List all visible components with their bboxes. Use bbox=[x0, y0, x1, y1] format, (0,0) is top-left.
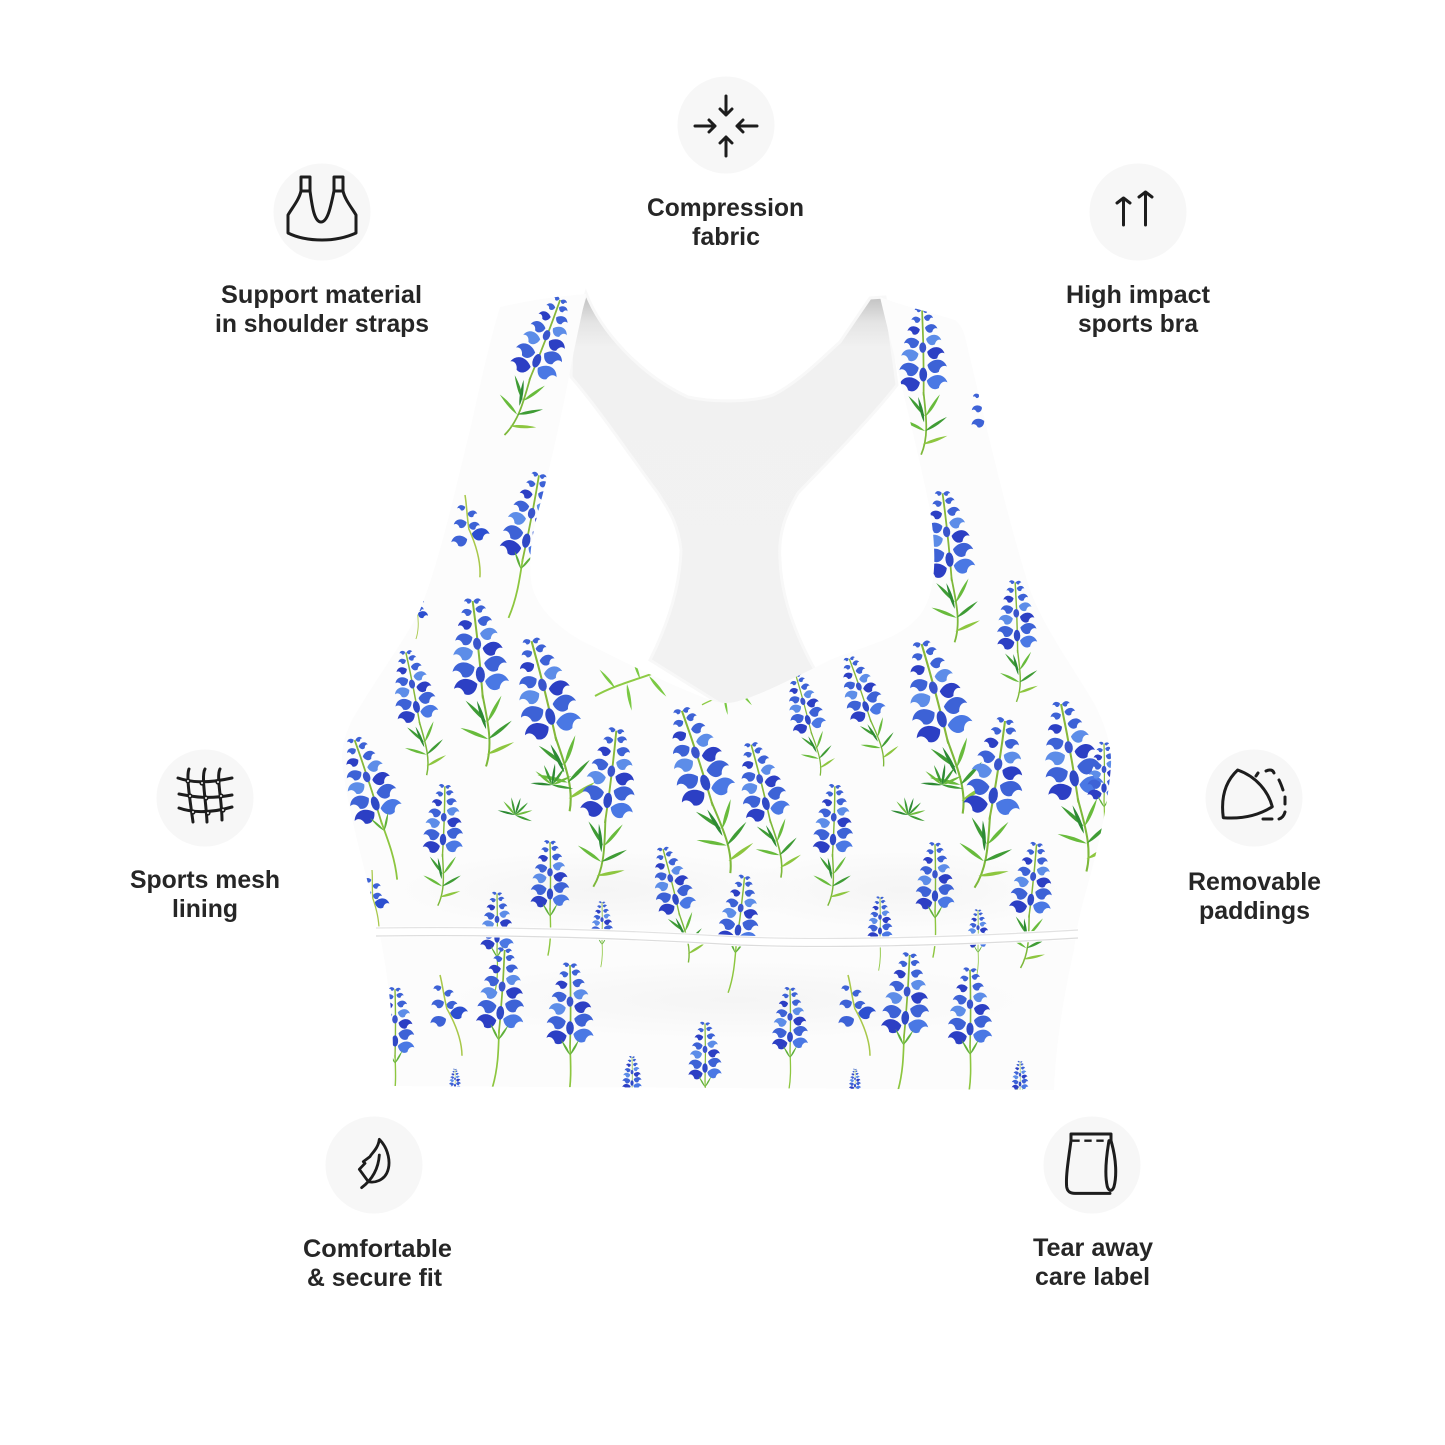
label: Comfortable bbox=[303, 1235, 452, 1263]
callout: sports mesh bbox=[130, 750, 280, 923]
label: Removable bbox=[1188, 868, 1321, 896]
label: lining bbox=[172, 895, 238, 923]
label: & secure fit bbox=[307, 1264, 443, 1292]
callout: tear away label bbox=[1033, 1116, 1153, 1291]
icon: padding shape bbox=[1206, 750, 1302, 846]
waistband seam bbox=[376, 928, 1078, 946]
fabric pattern: bluebonnet flowers bbox=[330, 289, 1121, 1121]
label bbox=[303, 1235, 452, 1292]
icon: up arrows bbox=[1090, 164, 1186, 260]
callout: support material bbox=[215, 164, 429, 338]
label bbox=[1188, 868, 1321, 925]
callout: compression fabric bbox=[647, 76, 804, 251]
icon: mesh net bbox=[156, 750, 254, 846]
callout: high impact bbox=[1066, 164, 1211, 338]
label bbox=[215, 281, 429, 338]
label: in shoulder straps bbox=[215, 310, 429, 338]
label: paddings bbox=[1199, 897, 1310, 925]
front fabric bbox=[342, 294, 1111, 1090]
label: care label bbox=[1035, 1263, 1150, 1291]
label: Sports mesh bbox=[130, 866, 280, 894]
icon: feather bbox=[326, 1116, 422, 1214]
label: fabric bbox=[692, 223, 760, 251]
icon: care label bbox=[1044, 1116, 1140, 1214]
callout: removable paddings bbox=[1188, 750, 1321, 925]
back mesh panel bbox=[571, 293, 897, 710]
label: Compression bbox=[647, 194, 804, 222]
label: Support material bbox=[221, 281, 422, 309]
label bbox=[647, 194, 804, 251]
label bbox=[1033, 1234, 1153, 1291]
label: Tear away bbox=[1033, 1234, 1153, 1262]
product: racerback sports bra bbox=[330, 289, 1121, 1121]
icon: inward arrows bbox=[678, 76, 774, 174]
label: sports bra bbox=[1078, 310, 1199, 338]
label bbox=[130, 866, 280, 923]
label bbox=[1066, 281, 1211, 338]
callout: comfortable fit bbox=[303, 1116, 452, 1292]
label: High impact bbox=[1066, 281, 1211, 309]
icon: bra straps bbox=[274, 164, 370, 260]
